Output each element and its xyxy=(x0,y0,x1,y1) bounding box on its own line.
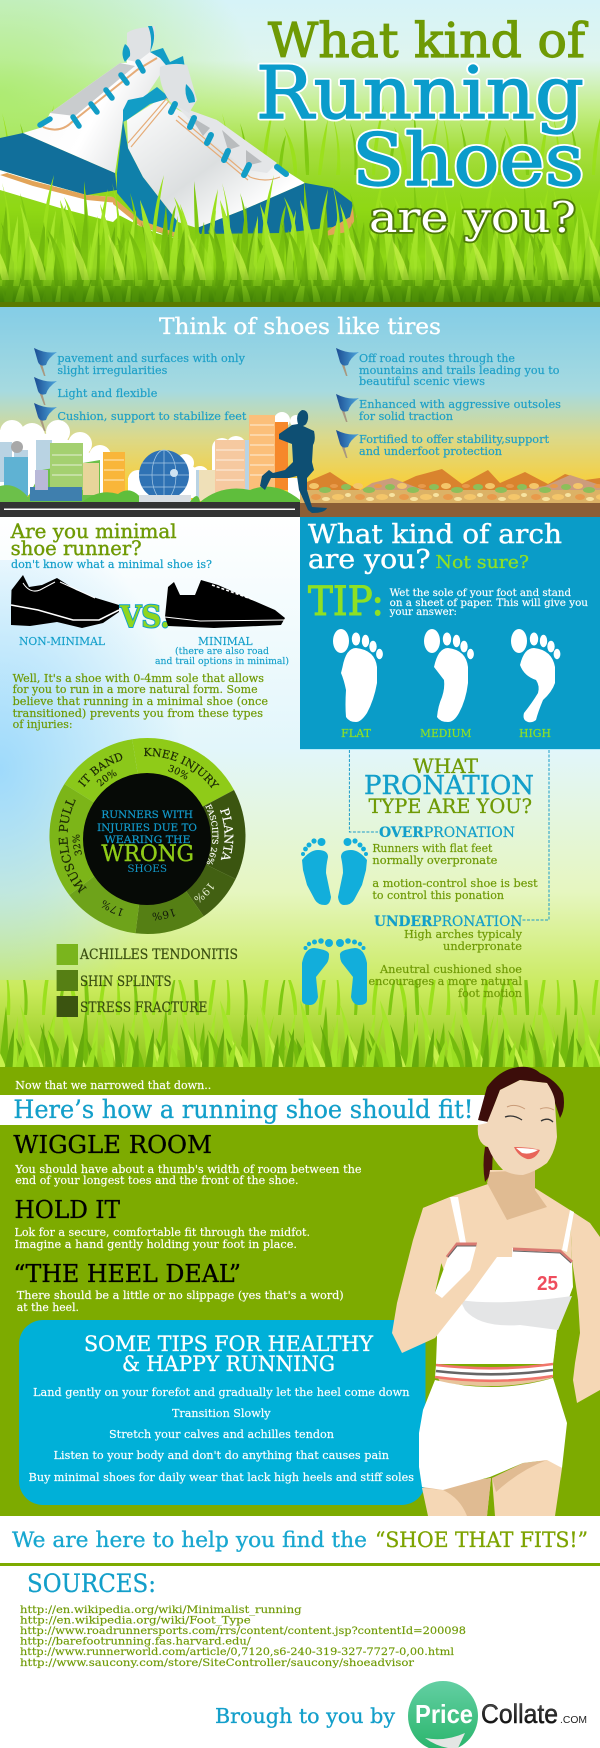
hero sky background xyxy=(0,0,600,303)
underpronation text: High arches typicaly xyxy=(404,928,523,941)
section background xyxy=(0,307,600,517)
panel background xyxy=(0,1067,600,1516)
panel: pronation xyxy=(301,750,549,1005)
road city scene xyxy=(0,412,302,503)
donut centre text: SHOES xyxy=(127,864,167,875)
left list: road shoes: Cushion, support to stabilize feet xyxy=(57,410,247,423)
right list: trail shoes: mountains and trails leading you to xyxy=(359,364,560,377)
right list: trail shoes xyxy=(359,352,561,458)
overpronation heading: OVERPRONATION xyxy=(379,825,515,841)
vs label: VS. xyxy=(119,600,170,635)
heading: shoe runner? xyxy=(11,537,142,560)
neck and shoulders xyxy=(423,1170,572,1363)
wiggle room: You should have about a thumb's width of room between the xyxy=(14,1163,362,1176)
right arm xyxy=(570,1210,600,1403)
segment label: muscle pull: 32% xyxy=(72,834,82,856)
icon: high arch foot xyxy=(511,629,560,722)
tip text: Wet the sole of your foot and stand xyxy=(390,588,572,599)
right shoe xyxy=(113,64,357,240)
heading: are you? xyxy=(308,545,430,575)
left list: road shoes: pavement and surfaces with only xyxy=(57,352,246,365)
shoe labels: MINIMAL xyxy=(198,635,253,648)
title: What kind of xyxy=(268,13,588,69)
sources heading: SOURCES: xyxy=(27,1569,156,1598)
paragraph xyxy=(13,672,268,731)
heading: Are you minimal xyxy=(10,520,177,543)
paragraph: for you to run in a more natural form. Some xyxy=(13,683,258,696)
call to action xyxy=(12,1528,588,1552)
left list: road shoes xyxy=(57,352,247,423)
hold it xyxy=(14,1196,310,1251)
sources list: http://www.runnerworld.com/article/0,7120,s6-240-319-327-7727-0,00.html xyxy=(20,1646,455,1658)
underpronation text: foot motion xyxy=(458,987,522,1000)
tip text: your answer: xyxy=(389,607,457,618)
divider band xyxy=(0,302,600,307)
intro text: Now that we narrowed that down.. xyxy=(15,1079,211,1092)
hold it: Imagine a hand gently holding your foot in place. xyxy=(14,1238,297,1251)
logo: PriceCollate: .COM xyxy=(560,1715,587,1726)
logo: PriceCollate: Collate xyxy=(481,1699,558,1729)
eyes brows and smile xyxy=(505,1105,554,1159)
panel: shoes like tires xyxy=(0,307,600,517)
tips list: Land gently on your forefot and gradually let the heel come down xyxy=(33,1386,409,1399)
segment label: it band: 20% xyxy=(96,770,117,787)
icon: flat foot xyxy=(333,629,383,722)
face xyxy=(478,1080,557,1175)
icon: flat footprints xyxy=(301,838,368,905)
sources list: http://www.saucony.com/store/SiteController/saucony/shoeadvisor xyxy=(20,1657,415,1669)
the heel deal xyxy=(13,1260,344,1314)
legend xyxy=(57,944,238,1017)
panel: footer xyxy=(0,1516,600,1748)
chart: injuries donut xyxy=(49,738,246,934)
left shoe xyxy=(0,26,185,222)
legs xyxy=(422,1458,562,1516)
logo: PriceCollate: Price xyxy=(415,1699,473,1729)
underpronation text: encourages a more natural xyxy=(368,975,522,988)
segment label: knee injury: KNEE INJURY xyxy=(144,748,220,788)
overpronation text: normally overpronate xyxy=(372,854,497,867)
logo: PriceCollate xyxy=(408,1681,587,1748)
the heel deal: There should be a little or no slippage (yes that's a word) xyxy=(17,1289,344,1302)
legend: STRESS FRACTURE xyxy=(80,1000,207,1016)
paragraph: Well, It's a shoe with 0-4mm sole that allows xyxy=(13,672,264,685)
overpronation text: to control this ponation xyxy=(372,889,504,902)
heading xyxy=(10,520,177,560)
sources list xyxy=(20,1604,466,1669)
shoe labels xyxy=(19,635,289,667)
title: Shoes xyxy=(352,118,584,202)
wiggle room: WIGGLE ROOM xyxy=(13,1131,212,1159)
right list: trail shoes: Off road routes through the xyxy=(359,352,515,365)
icon: pair of running shoes xyxy=(0,26,357,240)
shoe labels: (there are also road xyxy=(175,646,269,657)
underpronation text: underpronate xyxy=(443,940,522,953)
left list: road shoes: Light and flexible xyxy=(57,387,157,400)
heading: PRONATION xyxy=(364,770,534,801)
heading xyxy=(364,754,534,818)
panel background xyxy=(300,517,600,749)
heading: TYPE ARE YOU? xyxy=(368,794,532,818)
right list: trail shoes: Fortified to offer stability,support xyxy=(359,433,550,446)
skirt xyxy=(419,1378,567,1490)
tip label: TIP: xyxy=(308,579,384,625)
neck shadow xyxy=(487,1170,547,1220)
arch labels: MEDIUM xyxy=(420,726,472,740)
segment label: knee injury: 30% xyxy=(168,764,188,780)
paragraph: of injuries: xyxy=(13,718,73,731)
overpronation text xyxy=(372,842,538,902)
underpronation heading: UNDERPRONATION xyxy=(374,914,522,930)
segment percentages: 17% xyxy=(102,900,124,916)
wiggle room: end of your longest toes and the front of the shoe. xyxy=(15,1174,299,1187)
icon: medium foot xyxy=(424,629,474,722)
waist stripes xyxy=(435,1364,553,1381)
segment percentages xyxy=(102,882,214,920)
tips list: Buy minimal shoes for daily wear that lack high heels and stiff soles xyxy=(29,1471,414,1484)
hair back strand xyxy=(484,1147,493,1182)
the heel deal: at the heel. xyxy=(17,1301,79,1314)
brought by label: Brough to you by xyxy=(215,1704,395,1728)
segment label: planta fasciits: PLANTA xyxy=(220,808,234,860)
tip text: on a sheet of paper. This will give you xyxy=(390,598,589,609)
panel: arch type xyxy=(300,517,600,749)
left list: road shoes: slight irregularities xyxy=(57,364,168,377)
donut centre xyxy=(83,773,211,905)
segment label: muscle pull: MUSCLE PULL xyxy=(58,799,87,894)
hair xyxy=(478,1067,564,1122)
donut centre text: WRONG xyxy=(101,842,194,867)
arch labels xyxy=(341,726,551,740)
segment label: planta fasciits: FASCIITS 26% xyxy=(205,804,218,865)
panel: shoe fit xyxy=(0,1067,600,1516)
raised forearm and hand xyxy=(392,1197,513,1353)
sources list: http://en.wikipedia.org/wiki/Foot_Type xyxy=(20,1614,251,1626)
tips heading xyxy=(84,1332,374,1377)
tips list: Stretch your calves and achilles tendon xyxy=(109,1428,334,1441)
panel: mid background xyxy=(0,517,600,1068)
the heel deal: “THE HEEL DEAL” xyxy=(13,1260,241,1288)
title: Running xyxy=(256,51,584,135)
road xyxy=(0,502,300,517)
segment label: planta fasciits xyxy=(205,804,234,865)
tips background xyxy=(19,1320,426,1505)
title: are you? xyxy=(369,193,576,242)
shoe labels: NON-MINIMAL xyxy=(19,635,106,648)
heading: WHAT xyxy=(413,754,479,778)
icon: runner silhouette xyxy=(260,410,327,513)
tip text xyxy=(389,588,589,618)
midriff xyxy=(438,1372,553,1386)
paragraph: believe that running in a minimal shoe (once xyxy=(13,695,268,708)
call to action: We are here to help you find the xyxy=(12,1528,367,1552)
legend: SHIN SPLINTS xyxy=(80,974,172,990)
donut segments xyxy=(49,738,246,934)
arch labels: HIGH xyxy=(519,726,551,740)
legend: ACHILLES TENDONITIS xyxy=(79,947,238,963)
heading xyxy=(308,520,562,575)
call to action: “SHOE THAT FITS!” xyxy=(375,1528,588,1552)
sources list: http://en.wikipedia.org/wiki/Minimalist_running xyxy=(20,1604,302,1616)
panel: hero banner xyxy=(0,0,600,303)
icon: minimal shoe xyxy=(165,580,285,628)
donut centre text xyxy=(97,809,197,875)
donut centre text: WEARING THE xyxy=(104,834,190,846)
heading: What kind of arch xyxy=(308,520,562,550)
tips heading: SOME TIPS FOR HEALTHY xyxy=(84,1332,374,1357)
hold it: Lok for a secure, comfortable fit through the midfot. xyxy=(14,1226,310,1239)
illustration: smiling woman runner xyxy=(392,1067,600,1516)
panel: running tips xyxy=(19,1320,426,1505)
subheading: don't know what a minimal shoe is? xyxy=(11,558,212,571)
tank top xyxy=(435,1197,574,1364)
panel: minimal shoe runner xyxy=(10,520,289,731)
dirt track xyxy=(300,503,600,517)
arch labels: FLAT xyxy=(341,726,371,740)
wiggle room xyxy=(13,1131,362,1187)
icon: blue flag bullets xyxy=(34,348,359,458)
dashed connector xyxy=(349,750,549,920)
donut centre text: RUNNERS WITH xyxy=(101,809,193,821)
hold it: HOLD IT xyxy=(14,1196,120,1224)
sources list: http://www.roadrunnersports.com/rrs/content/content.jsp?contentId=200098 xyxy=(20,1625,466,1637)
underpronation text xyxy=(368,928,523,1000)
sources list: http://barefootrunning.fas.harvard.edu/ xyxy=(20,1636,251,1648)
paragraph: transitioned) prevents you from these types xyxy=(13,707,263,720)
right list: trail shoes: Enhanced with aggressive outsoles xyxy=(359,398,561,411)
tips list xyxy=(29,1386,414,1484)
segment percentages: 19% xyxy=(194,882,214,903)
segment label: it band: IT BAND xyxy=(78,753,122,788)
heading: Think of shoes like tires xyxy=(159,315,441,340)
foreground grass xyxy=(0,175,600,303)
donut centre text: INJURIES DUE TO xyxy=(97,822,197,834)
footer background xyxy=(0,1516,600,1748)
number 25: 25 xyxy=(537,1273,558,1295)
icon: non-minimal shoe xyxy=(11,575,119,628)
right list: trail shoes: and underfoot protection xyxy=(359,445,502,458)
mountains trail scene xyxy=(300,469,600,503)
right list: trail shoes: beautiful scenic views xyxy=(359,375,485,388)
underpronation text: Aneutral cushioned shoe xyxy=(379,963,522,976)
overpronation text: a motion-control shoe is best xyxy=(372,877,538,890)
title: Shoes xyxy=(352,118,584,202)
tips list: Transition Slowly xyxy=(172,1407,271,1420)
title: Running xyxy=(256,51,584,135)
tips list: Listen to your body and don't do anything that causes pain xyxy=(54,1449,389,1462)
not sure label: Not sure? xyxy=(436,552,529,573)
overpronation text: Runners with flat feet xyxy=(372,842,493,855)
shoe labels: and trail options in minimal) xyxy=(155,656,289,667)
tips heading: & HAPPY RUNNING xyxy=(122,1352,335,1377)
title xyxy=(256,13,588,242)
right list: trail shoes: for solid traction xyxy=(359,410,453,423)
segment percentages: 16% xyxy=(152,908,176,920)
icon: high arch footprints xyxy=(302,938,367,1005)
banner: Here’s how a running shoe should fit! xyxy=(13,1095,473,1124)
